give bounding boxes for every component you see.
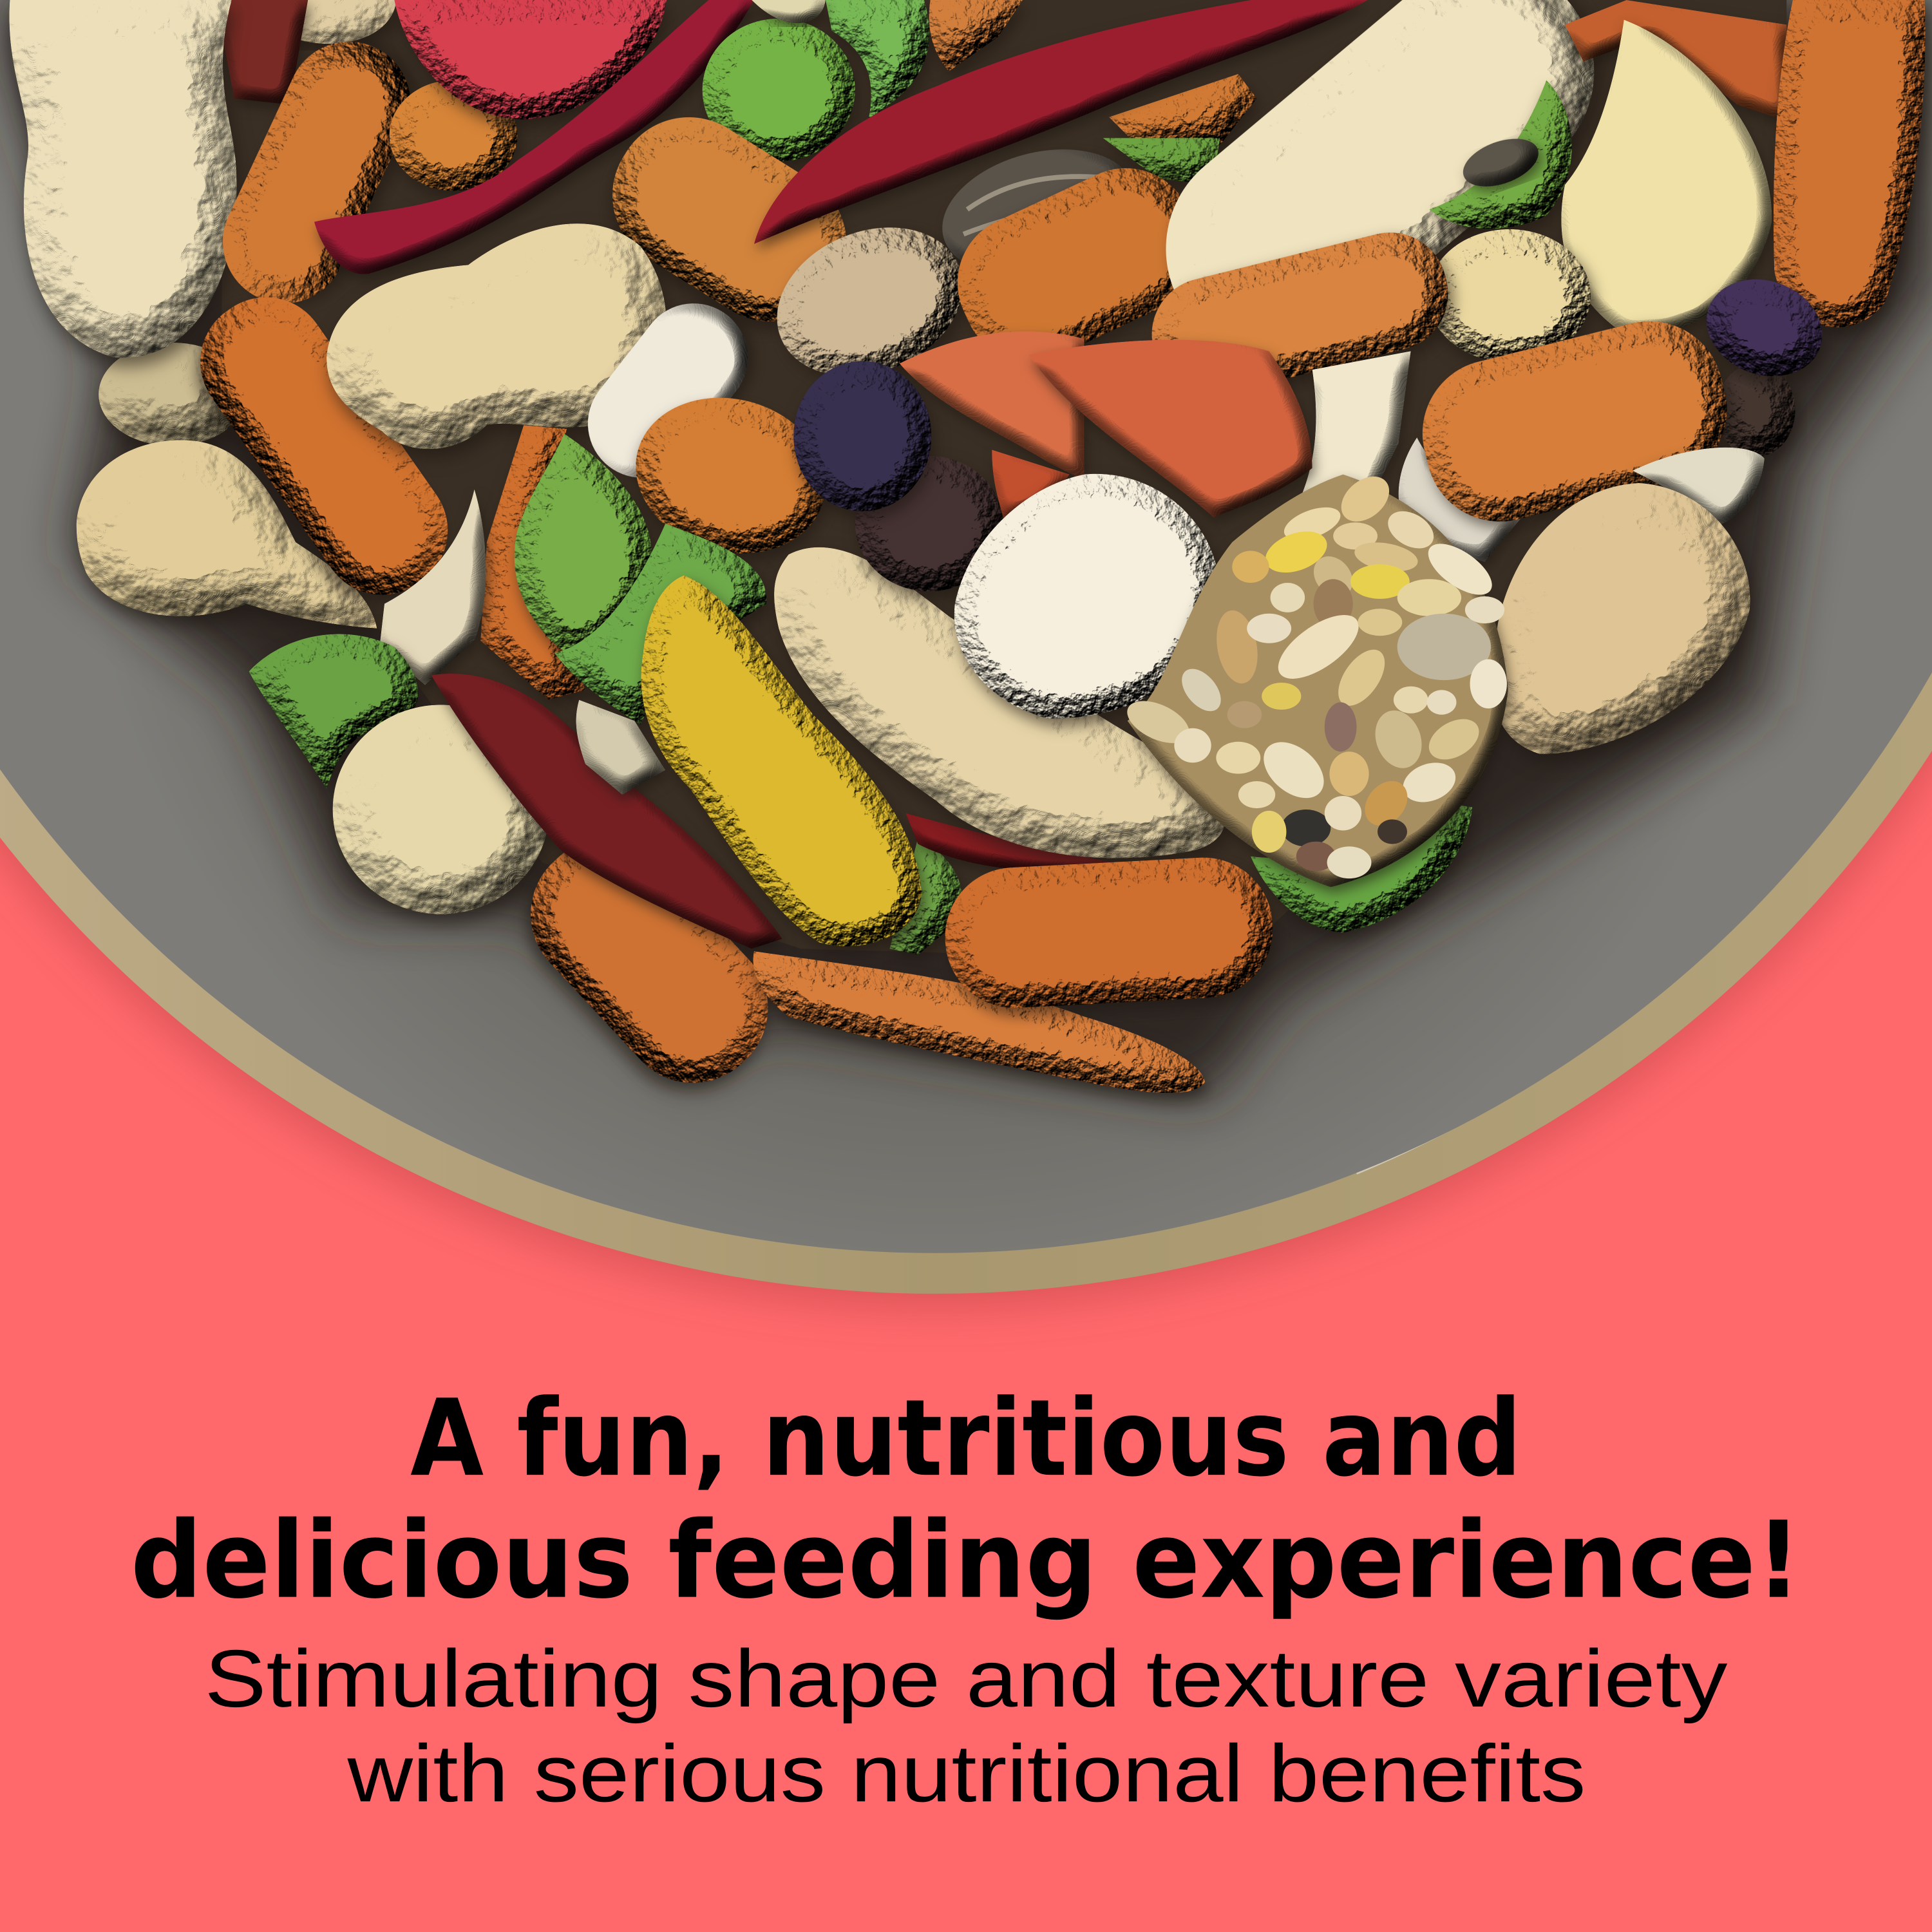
orange puff bbox=[390, 80, 518, 191]
top peanut sliver bbox=[252, 0, 397, 44]
large centre peanut bbox=[774, 547, 1226, 858]
dark chili bit bbox=[905, 813, 1115, 871]
pale peanut bit bbox=[752, 0, 826, 23]
dark backing bbox=[222, 0, 1786, 961]
red fruit disc bbox=[394, 0, 667, 120]
orange stick low bbox=[501, 810, 797, 1112]
shadow under pile bbox=[0, 0, 1932, 1097]
orange bit top bbox=[929, 0, 1023, 71]
orange puff stick bbox=[202, 21, 431, 323]
orange stick right of seed bbox=[935, 146, 1221, 384]
round peanut right bbox=[1492, 483, 1750, 754]
tan round puff bbox=[755, 201, 985, 403]
orange stick lower right bbox=[942, 854, 1276, 1012]
subheading line 2: with serious nutritional benefits bbox=[346, 1728, 1586, 1819]
pale chip bbox=[1300, 351, 1411, 505]
orange stick under seed bbox=[480, 425, 585, 700]
green puff low left bbox=[249, 634, 418, 788]
subheading line 1: Stimulating shape and texture variety bbox=[205, 1633, 1727, 1724]
orange stick mid bbox=[1140, 220, 1460, 408]
peanut upper centre bbox=[327, 223, 667, 449]
bowl interior bbox=[0, 0, 1932, 1253]
peanut behind left bbox=[99, 343, 247, 446]
green puff bbox=[703, 19, 855, 162]
green piece right bbox=[1429, 80, 1572, 229]
white seed right bbox=[1633, 448, 1765, 525]
tan chip bbox=[1561, 20, 1772, 336]
dark lava bit bbox=[1716, 363, 1795, 457]
food pile bbox=[0, 0, 1932, 1112]
seeds bbox=[1121, 468, 1507, 878]
headline line 1: A fun, nutritious and bbox=[410, 1376, 1522, 1500]
seed ball core bbox=[1128, 475, 1508, 887]
tan nugget bbox=[1428, 229, 1591, 362]
centre red chili bbox=[754, 0, 1368, 244]
orange stick centre top bbox=[585, 90, 875, 350]
white seed behind ball bbox=[1399, 437, 1522, 562]
dark berry right bbox=[1693, 263, 1836, 392]
orange stick right bbox=[1406, 305, 1743, 537]
headline bbox=[131, 1376, 1801, 1622]
left peanut bbox=[77, 440, 377, 629]
top peanut large bbox=[1122, 0, 1638, 402]
green bit bbox=[1103, 138, 1220, 185]
green bit low bbox=[889, 838, 962, 955]
orange round puff bbox=[618, 377, 843, 574]
blueberry bbox=[793, 361, 931, 511]
chili left bbox=[314, 0, 754, 274]
white seed centre bbox=[566, 281, 770, 500]
bowl bbox=[0, 0, 1932, 1310]
orange stick far right bbox=[1774, 0, 1926, 327]
bowl shadow bbox=[0, 0, 1932, 1310]
red orange flake top right bbox=[1565, 0, 1793, 123]
headline line 2: delicious feeding experience! bbox=[131, 1499, 1801, 1622]
green puff pair bbox=[515, 433, 766, 724]
green curl right low bbox=[1251, 801, 1472, 933]
shell flake bbox=[576, 700, 665, 795]
seed ball bbox=[1121, 468, 1508, 887]
subheading bbox=[205, 1633, 1727, 1819]
top-left peanut bbox=[9, 0, 237, 358]
sesame rice ball bbox=[954, 474, 1220, 719]
peanut ball left bbox=[333, 705, 549, 914]
carrot stick bbox=[753, 951, 1205, 1093]
orange bit bbox=[1109, 74, 1257, 146]
chip left bbox=[379, 489, 486, 685]
sunflower seed bbox=[928, 129, 1149, 294]
yellow puff bbox=[641, 575, 922, 946]
jerky pieces bbox=[900, 331, 1312, 520]
dark red flake bbox=[216, 0, 308, 105]
orange stick left bbox=[176, 273, 472, 619]
green curl bbox=[826, 0, 929, 118]
bowl rim bbox=[0, 0, 1932, 1294]
small seed right bbox=[1457, 129, 1545, 196]
raisin bbox=[855, 456, 1003, 591]
rim highlight bbox=[1356, 641, 1932, 1171]
dark red chili low bbox=[431, 674, 782, 949]
